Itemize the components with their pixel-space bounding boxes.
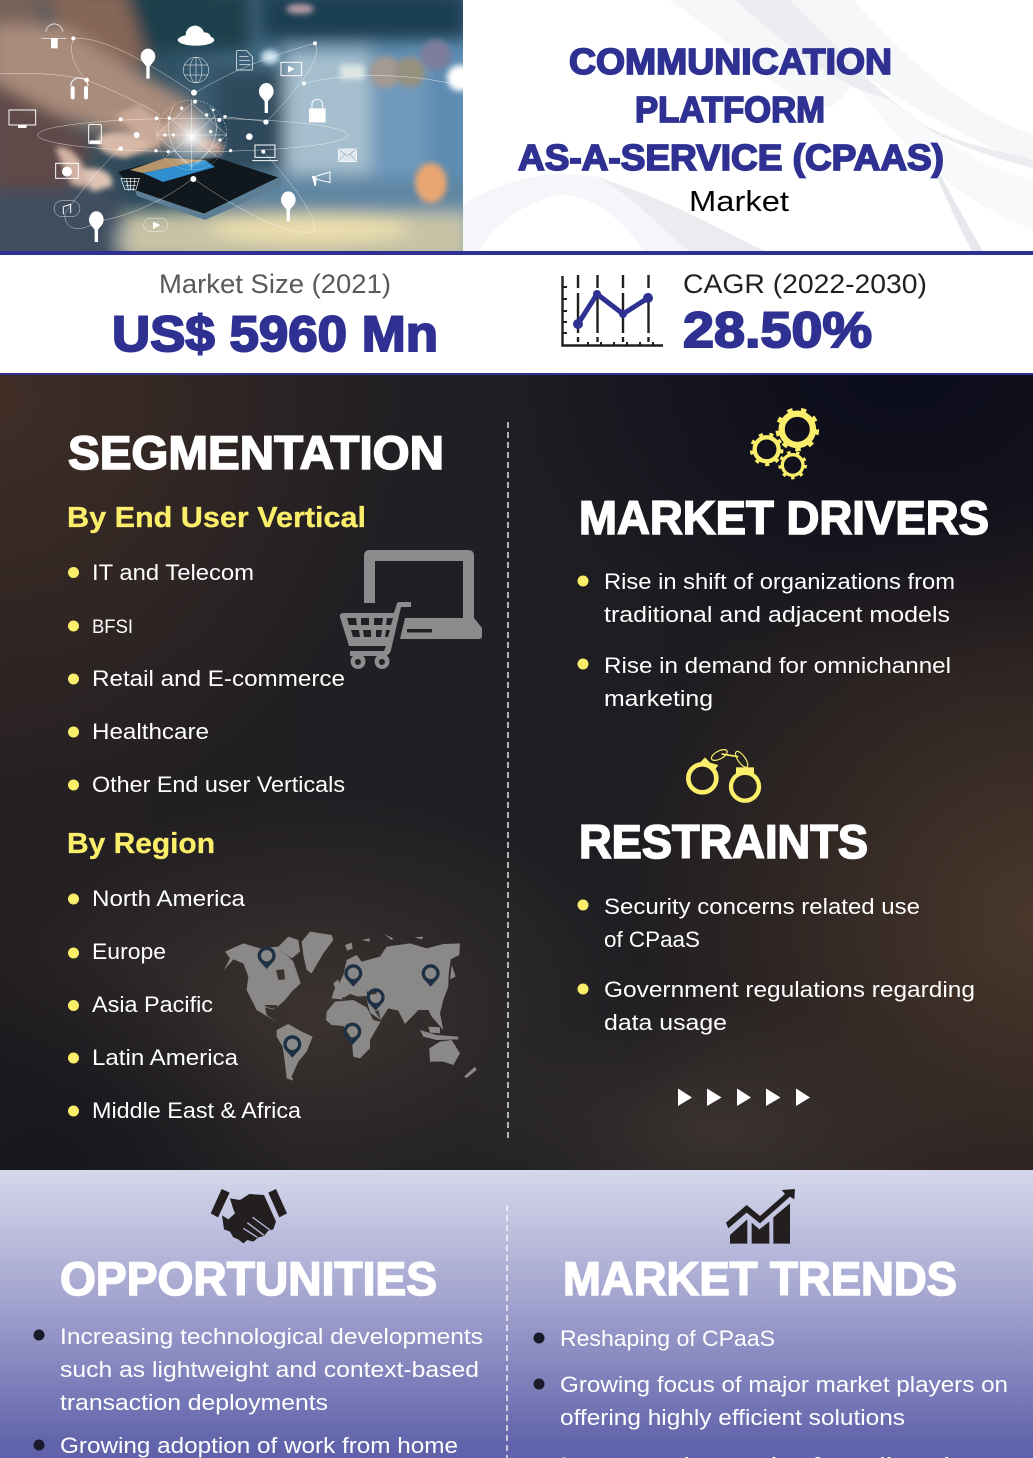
list: opportunities: transaction deployments xyxy=(60,1390,328,1415)
list: opportunities: Increasing technological developments xyxy=(60,1324,483,1349)
panel: restraints xyxy=(578,747,975,1106)
location pins xyxy=(258,947,440,1058)
fingers over phone xyxy=(55,105,225,192)
list: drivers: marketing xyxy=(604,686,713,711)
list: drivers: traditional and adjacent models xyxy=(604,602,950,627)
header background waves xyxy=(463,0,1033,251)
list: market trends: Reshaping of CPaaS xyxy=(560,1326,775,1351)
icon: handcuffs xyxy=(688,747,759,801)
list: drivers: Rise in shift of organizations from xyxy=(604,569,955,594)
stat: market size xyxy=(112,269,438,362)
icon: line chart xyxy=(562,275,663,346)
title xyxy=(518,41,944,218)
list: restraints: of CPaaS xyxy=(604,927,700,952)
icon: laptop with shopping cart xyxy=(340,550,482,669)
icon: smartphone xyxy=(118,158,281,220)
list: drivers: Rise in demand for omnichannel xyxy=(604,653,951,678)
dashed divider xyxy=(507,422,509,1142)
title: Market xyxy=(689,186,789,218)
icon: gears xyxy=(752,410,817,478)
list: regions: Latin America xyxy=(92,1045,239,1070)
stat: CAGR: CAGR (2022-2030) xyxy=(683,269,927,299)
list: end user verticals: Other End user Verticals xyxy=(92,772,345,797)
list: end user verticals: BFSI xyxy=(92,616,133,638)
world map with location pins xyxy=(224,932,477,1081)
heading: segmentation: SEGMENTATION xyxy=(68,426,444,479)
icon: handshake xyxy=(211,1189,287,1243)
list: end user verticals: Retail and E-commerce xyxy=(92,666,345,691)
dashed divider xyxy=(506,1205,508,1458)
list: market trends: Growing focus of major market players on xyxy=(560,1372,1008,1397)
subheading: by region: By Region xyxy=(67,828,215,860)
subheading: by end user vertical: By End User Vertical xyxy=(67,502,366,534)
list: end user verticals: Healthcare xyxy=(92,719,209,744)
stat: market size: Market Size (2021) xyxy=(159,269,391,299)
title: COMMUNICATION xyxy=(569,41,892,82)
list: restraints xyxy=(578,894,975,1035)
heading: market drivers: MARKET DRIVERS xyxy=(579,491,989,544)
panel: market drivers xyxy=(578,410,989,711)
list: opportunities xyxy=(34,1324,483,1458)
lavender panel background xyxy=(0,1170,1033,1458)
stat: market size: US$ 5960 Mn xyxy=(112,306,438,362)
list: opportunities: such as lightweight and context-based xyxy=(60,1357,479,1382)
icon: rising bar chart xyxy=(726,1189,795,1244)
list: end user verticals: IT and Telecom xyxy=(92,560,254,585)
list: regions: Asia Pacific xyxy=(92,992,213,1017)
list: opportunities: Growing adoption of work from home xyxy=(60,1433,458,1458)
list: regions: Middle East & Africa xyxy=(92,1098,302,1123)
list: market trends xyxy=(534,1326,1008,1458)
list: restraints: data usage xyxy=(604,1010,727,1035)
list: drivers xyxy=(578,569,955,711)
panel: segmentation xyxy=(67,426,482,1123)
list: regions: North America xyxy=(92,886,246,911)
list: regions xyxy=(68,886,302,1123)
stat: CAGR: 28.50% xyxy=(683,302,872,358)
stat: CAGR xyxy=(683,269,927,358)
network diagram with icons xyxy=(0,24,463,242)
dark panel background xyxy=(0,375,1033,1170)
panel: market trends xyxy=(534,1189,1008,1458)
network glow xyxy=(163,107,222,168)
title: AS-A-SERVICE (CPAAS) xyxy=(518,137,944,178)
list: regions: Europe xyxy=(92,939,166,964)
list: end user verticals xyxy=(68,560,345,797)
list: restraints: Security concerns related use xyxy=(604,894,920,919)
title: PLATFORM xyxy=(635,89,825,130)
panel: opportunities xyxy=(34,1189,483,1458)
heading: market trends: MARKET TRENDS xyxy=(563,1252,957,1305)
heading: restraints: RESTRAINTS xyxy=(579,815,868,868)
header photo: hand holding smartphone with network icons xyxy=(0,0,473,262)
list: restraints: Government regulations regarding xyxy=(604,977,975,1002)
list: market trends: offering highly efficient solutions xyxy=(560,1405,905,1430)
stat strip xyxy=(0,251,1033,375)
arrows xyxy=(678,1088,810,1106)
heading: opportunities: OPPORTUNITIES xyxy=(60,1252,437,1305)
